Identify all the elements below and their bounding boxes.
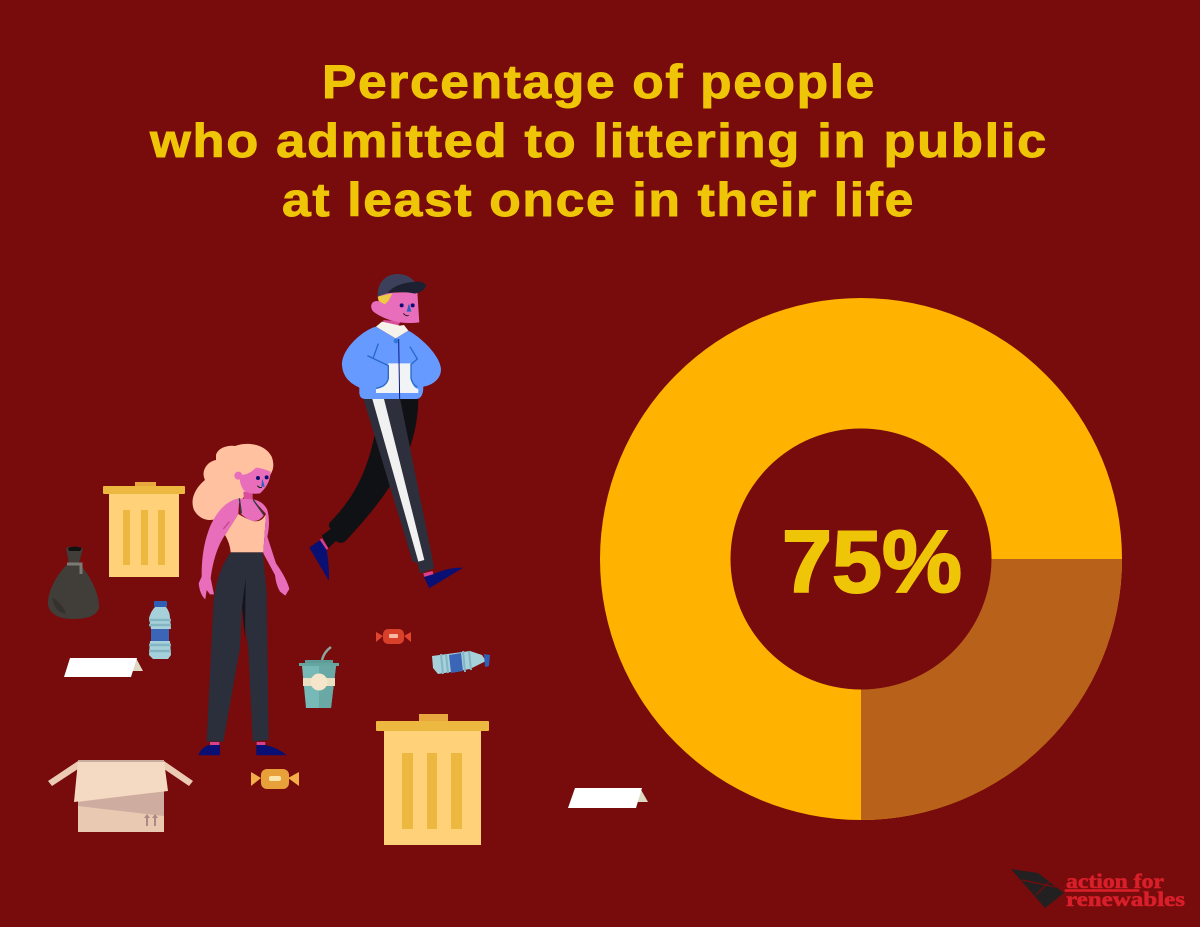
donut chart: 75% <box>600 298 1122 820</box>
icon: fallen water bottle <box>432 651 490 674</box>
icon: upright water bottle <box>149 601 171 659</box>
icon: orange candy <box>251 769 299 789</box>
icon: garbage bag <box>48 546 99 619</box>
icon: white paper scrap left <box>64 658 143 677</box>
icon: paper cup <box>299 647 339 708</box>
illustration: walking man <box>309 274 463 588</box>
icon: white paper scrap bottom <box>568 788 648 808</box>
icon: red candy <box>376 629 411 644</box>
logo: action for renewables <box>1011 869 1185 911</box>
icon: small trash bin <box>103 482 185 577</box>
title: at least once in their life <box>282 173 915 226</box>
donut value: 75% <box>782 512 962 611</box>
icon: cardboard box <box>48 760 193 832</box>
title: who admitted to littering in public <box>149 114 1048 167</box>
illustration: woman with pink hair <box>193 444 289 755</box>
title <box>149 55 1048 226</box>
logo: action for renewables: action for <box>1066 869 1164 893</box>
title: Percentage of people <box>322 55 876 108</box>
logo: action for renewables: renewables <box>1066 887 1185 911</box>
icon: large trash bin <box>376 714 489 845</box>
